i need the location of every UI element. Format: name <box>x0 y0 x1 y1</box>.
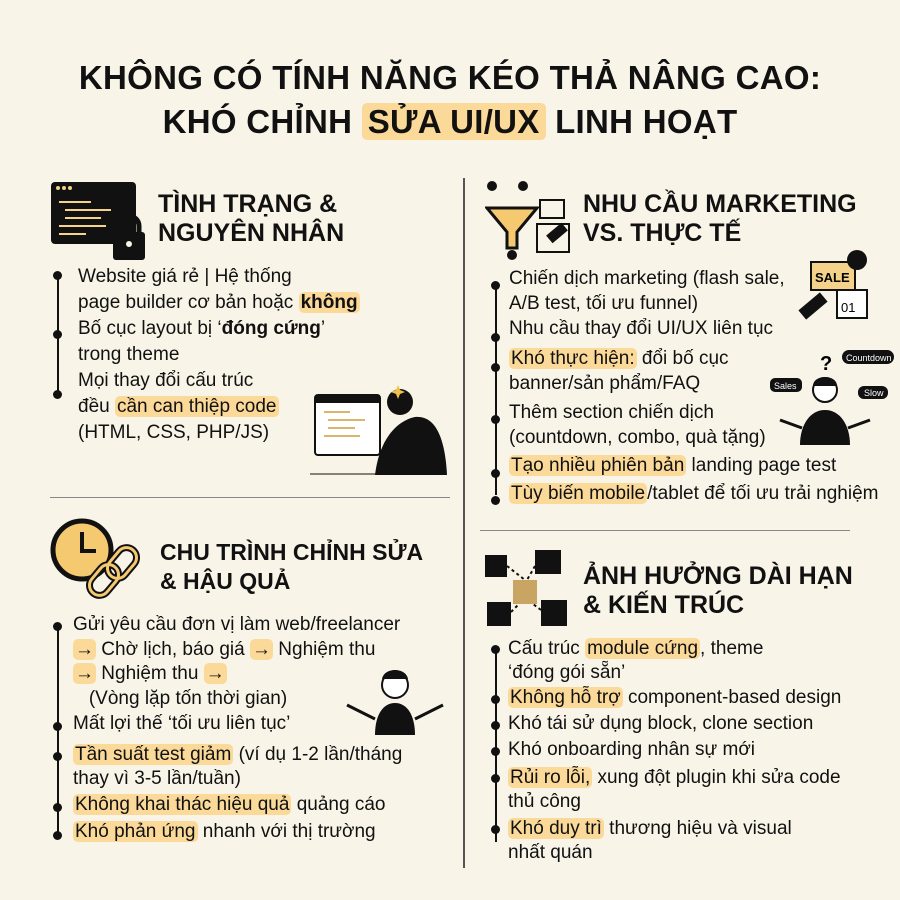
bullets <box>508 638 763 683</box>
panel: ảnh hưởng <box>485 550 853 863</box>
illustration: confused person: Countdown <box>846 353 892 363</box>
bullets: Cấu trúc module cứng, theme <box>508 638 763 659</box>
heading: TÌNH TRẠNG & <box>158 190 337 218</box>
panel: tình trạng <box>51 182 447 475</box>
panel: ảnh hưởng: Khó duy trì thương hiệu và visual <box>510 818 792 839</box>
bullets: đều cần can thiệp code <box>78 396 276 417</box>
panel: nhu cầu marketing: Tạo nhiều phiên bản landing page test <box>511 455 836 476</box>
heading: NGUYÊN NHÂN <box>158 219 344 247</box>
title: KHÓ CHỈNH SỬA UI/UX LINH HOẠT <box>163 103 737 140</box>
icon: code window lock <box>51 182 145 260</box>
heading <box>583 190 857 247</box>
title: KHÔNG CÓ TÍNH NĂNG KÉO THẢ NÂNG CAO: <box>79 59 821 96</box>
bullets: ‘đóng gói sẵn’ <box>508 662 625 683</box>
icon: sale calendar: 01 <box>841 300 855 315</box>
bullets <box>509 268 785 314</box>
heading: ẢNH HƯỞNG DÀI HẠN <box>583 562 853 590</box>
bullets: Bố cục layout bị ‘đóng cứng’ <box>78 318 325 339</box>
heading: NHU CẦU MARKETING <box>583 190 857 218</box>
panel: nhu cầu marketing: Tùy biến mobile/tablet để tối ưu trải nghiệm <box>511 483 878 504</box>
bullets: → Chờ lịch, báo giá → Nghiệm thu <box>75 638 375 660</box>
bullets: → Nghiệm thu → <box>75 663 225 684</box>
panel: chu trình <box>50 518 444 842</box>
panel: ảnh hưởng: Rủi ro lỗi, xung đột plugin khi sửa code <box>510 767 841 788</box>
icon: sale calendar: SALE <box>815 270 850 285</box>
panel: chu trình: Mất lợi thế ‘tối ưu liên tục’ <box>73 713 290 734</box>
illustration: person coding <box>310 385 447 475</box>
panel: ảnh hưởng: Khó tái sử dụng block, clone section <box>508 713 813 734</box>
panel: ảnh hưởng: nhất quán <box>508 842 593 863</box>
panel: nhu cầu marketing: Nhu cầu thay đổi UI/UX liên tục <box>509 318 773 339</box>
illustration: confused person <box>770 350 894 445</box>
bullets: A/B test, tối ưu funnel) <box>509 293 698 314</box>
bullets: page builder cơ bản hoặc không <box>78 292 358 313</box>
bullets: Chiến dịch marketing (flash sale, <box>509 268 785 289</box>
icon: clock and chain <box>50 518 140 599</box>
heading <box>158 190 344 247</box>
panel: nhu cầu marketing: Thêm section chiến dịch <box>509 402 714 423</box>
panel: nhu cầu marketing: banner/sản phẩm/FAQ <box>509 373 700 394</box>
heading: & KIẾN TRÚC <box>583 591 744 619</box>
icon: funnel <box>485 181 570 260</box>
title <box>79 59 821 140</box>
heading: & HẬU QUẢ <box>160 568 290 594</box>
panel: ảnh hưởng: thủ công <box>508 791 581 812</box>
bullets: Mọi thay đổi cấu trúc <box>78 370 253 391</box>
panel: chu trình: Tần suất test giảm (ví dụ 1-2 lần/tháng <box>75 744 402 765</box>
bullets <box>78 266 360 443</box>
icon: puzzle blocks <box>485 550 567 626</box>
bullets <box>73 614 400 708</box>
panel: nhu cầu marketing: (countdown, combo, quà tặng) <box>509 427 766 448</box>
panel: ảnh hưởng: Không hỗ trợ component-based design <box>510 687 841 708</box>
panel: chu trình: Khó phản ứng nhanh với thị trường <box>75 821 376 842</box>
bullets: (Vòng lặp tốn thời gian) <box>89 688 287 708</box>
panel: ảnh hưởng: Khó onboarding nhân sự mới <box>508 739 755 760</box>
panel: chu trình: Không khai thác hiệu quả quảng cáo <box>75 794 385 815</box>
illustration: confused person: Slow <box>864 388 884 398</box>
illustration: shrugging person <box>346 670 444 735</box>
illustration: confused person: Sales <box>774 381 797 391</box>
bullets: (HTML, CSS, PHP/JS) <box>78 422 269 443</box>
bullets: trong theme <box>78 344 179 365</box>
heading <box>583 561 853 619</box>
panel: nhu cầu marketing: Khó thực hiện: đổi bố cục <box>511 348 729 369</box>
bullets: Gửi yêu cầu đơn vị làm web/freelancer <box>73 614 400 635</box>
panel: nhu cầu marketing <box>485 181 894 505</box>
heading <box>160 539 423 594</box>
heading: CHU TRÌNH CHỈNH SỬA <box>160 539 423 565</box>
bullets: Website giá rẻ | Hệ thống <box>78 266 292 287</box>
illustration: confused person: ? <box>820 353 832 375</box>
panel: chu trình: thay vì 3-5 lần/tuần) <box>73 768 241 789</box>
icon: sale calendar <box>798 250 868 320</box>
heading: VS. THỰC TẾ <box>583 219 741 247</box>
